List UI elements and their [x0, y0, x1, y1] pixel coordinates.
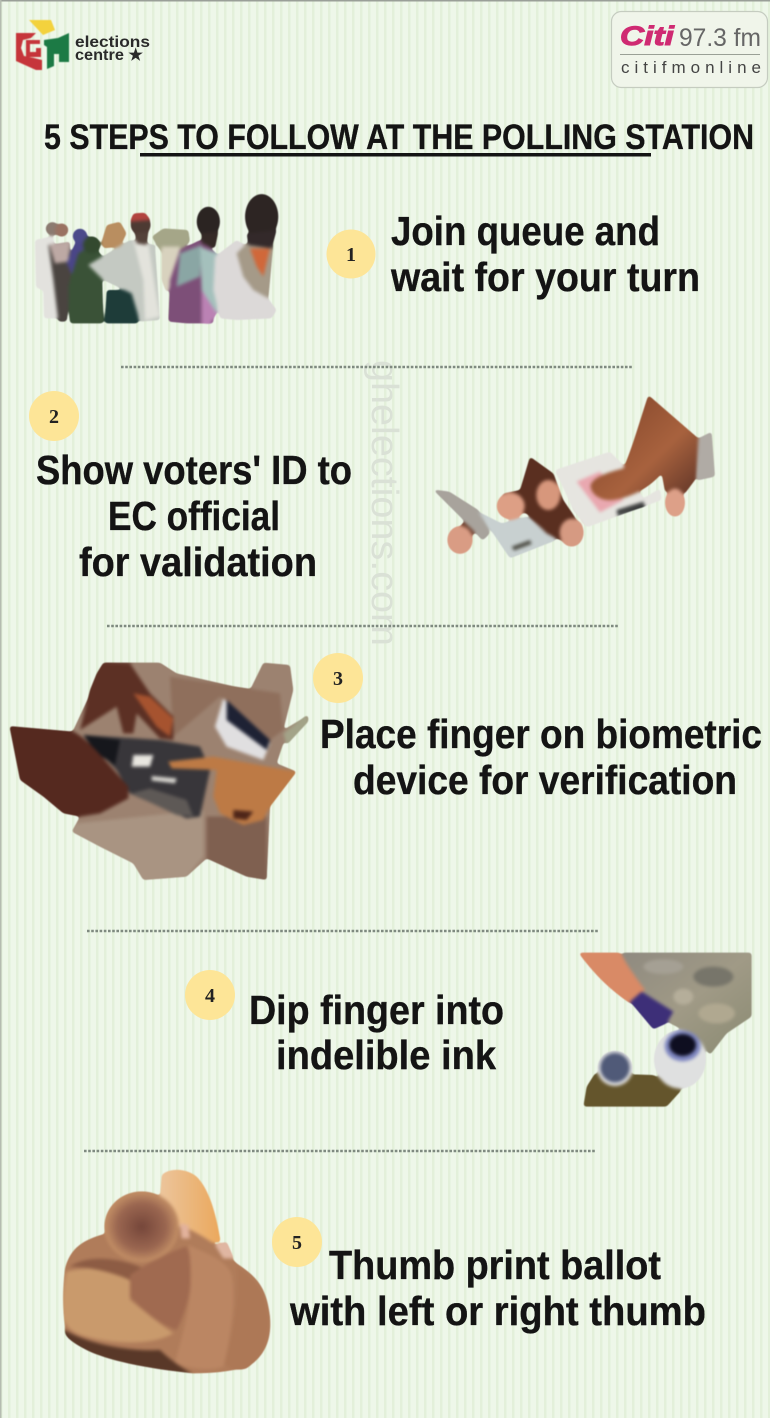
- logo: elections centre: centre ★: [75, 47, 144, 64]
- step 3 photo: biometric verification device: [9, 663, 308, 880]
- frequency: 97.3 fm: [679, 24, 761, 52]
- step 5 number badge: 5: [292, 1232, 302, 1254]
- watermark: ghelections.com: ghelections.com: [363, 360, 405, 646]
- step 4 number badge: [185, 970, 235, 1020]
- step 2 photo: hand holding voter ID: [433, 395, 715, 558]
- step 5 photo: thumb print hand: [63, 1170, 270, 1373]
- step 3 text: [320, 711, 762, 803]
- step 1 number badge: [326, 230, 376, 278]
- website: citifmonline: [621, 58, 761, 77]
- step 4 text: Dip finger into: [249, 987, 504, 1033]
- step 2 number badge: [29, 391, 79, 441]
- Citi wordmark: Citi: [620, 21, 675, 51]
- step 4 text: [249, 987, 504, 1078]
- step 3 number badge: 3: [333, 668, 343, 690]
- step 1 photo: voters queueing: [35, 194, 278, 324]
- step 1 text: [390, 208, 700, 300]
- step 5 number badge: [272, 1217, 322, 1267]
- step 4 text: indelible ink: [276, 1032, 496, 1078]
- step 5 text: Thumb print ballot: [329, 1242, 661, 1288]
- step 3 number badge: [313, 653, 363, 703]
- step 5 text: [289, 1242, 706, 1334]
- step 4 number badge: 4: [205, 985, 215, 1007]
- logo text: elections: [75, 34, 150, 51]
- step 2 text: for validation: [79, 539, 317, 585]
- step 1 number badge: 1: [346, 244, 356, 266]
- logo: elections centre: [16, 20, 150, 70]
- step 2 text: [36, 447, 352, 585]
- icon: GH emblem: [16, 20, 69, 70]
- step 4 photo: finger dipped in ink: [578, 953, 752, 1107]
- step 2 text: Show voters' ID to: [36, 447, 352, 493]
- step 3 text: device for verification: [353, 757, 737, 803]
- step 1 text: wait for your turn: [390, 254, 700, 300]
- step 5 text: with left or right thumb: [289, 1288, 706, 1334]
- logo: Citi 97.3 fm: [612, 12, 768, 88]
- step 2 number badge: 2: [49, 406, 59, 428]
- step 1 text: Join queue and: [391, 208, 660, 254]
- step 2 text: EC official: [108, 493, 280, 539]
